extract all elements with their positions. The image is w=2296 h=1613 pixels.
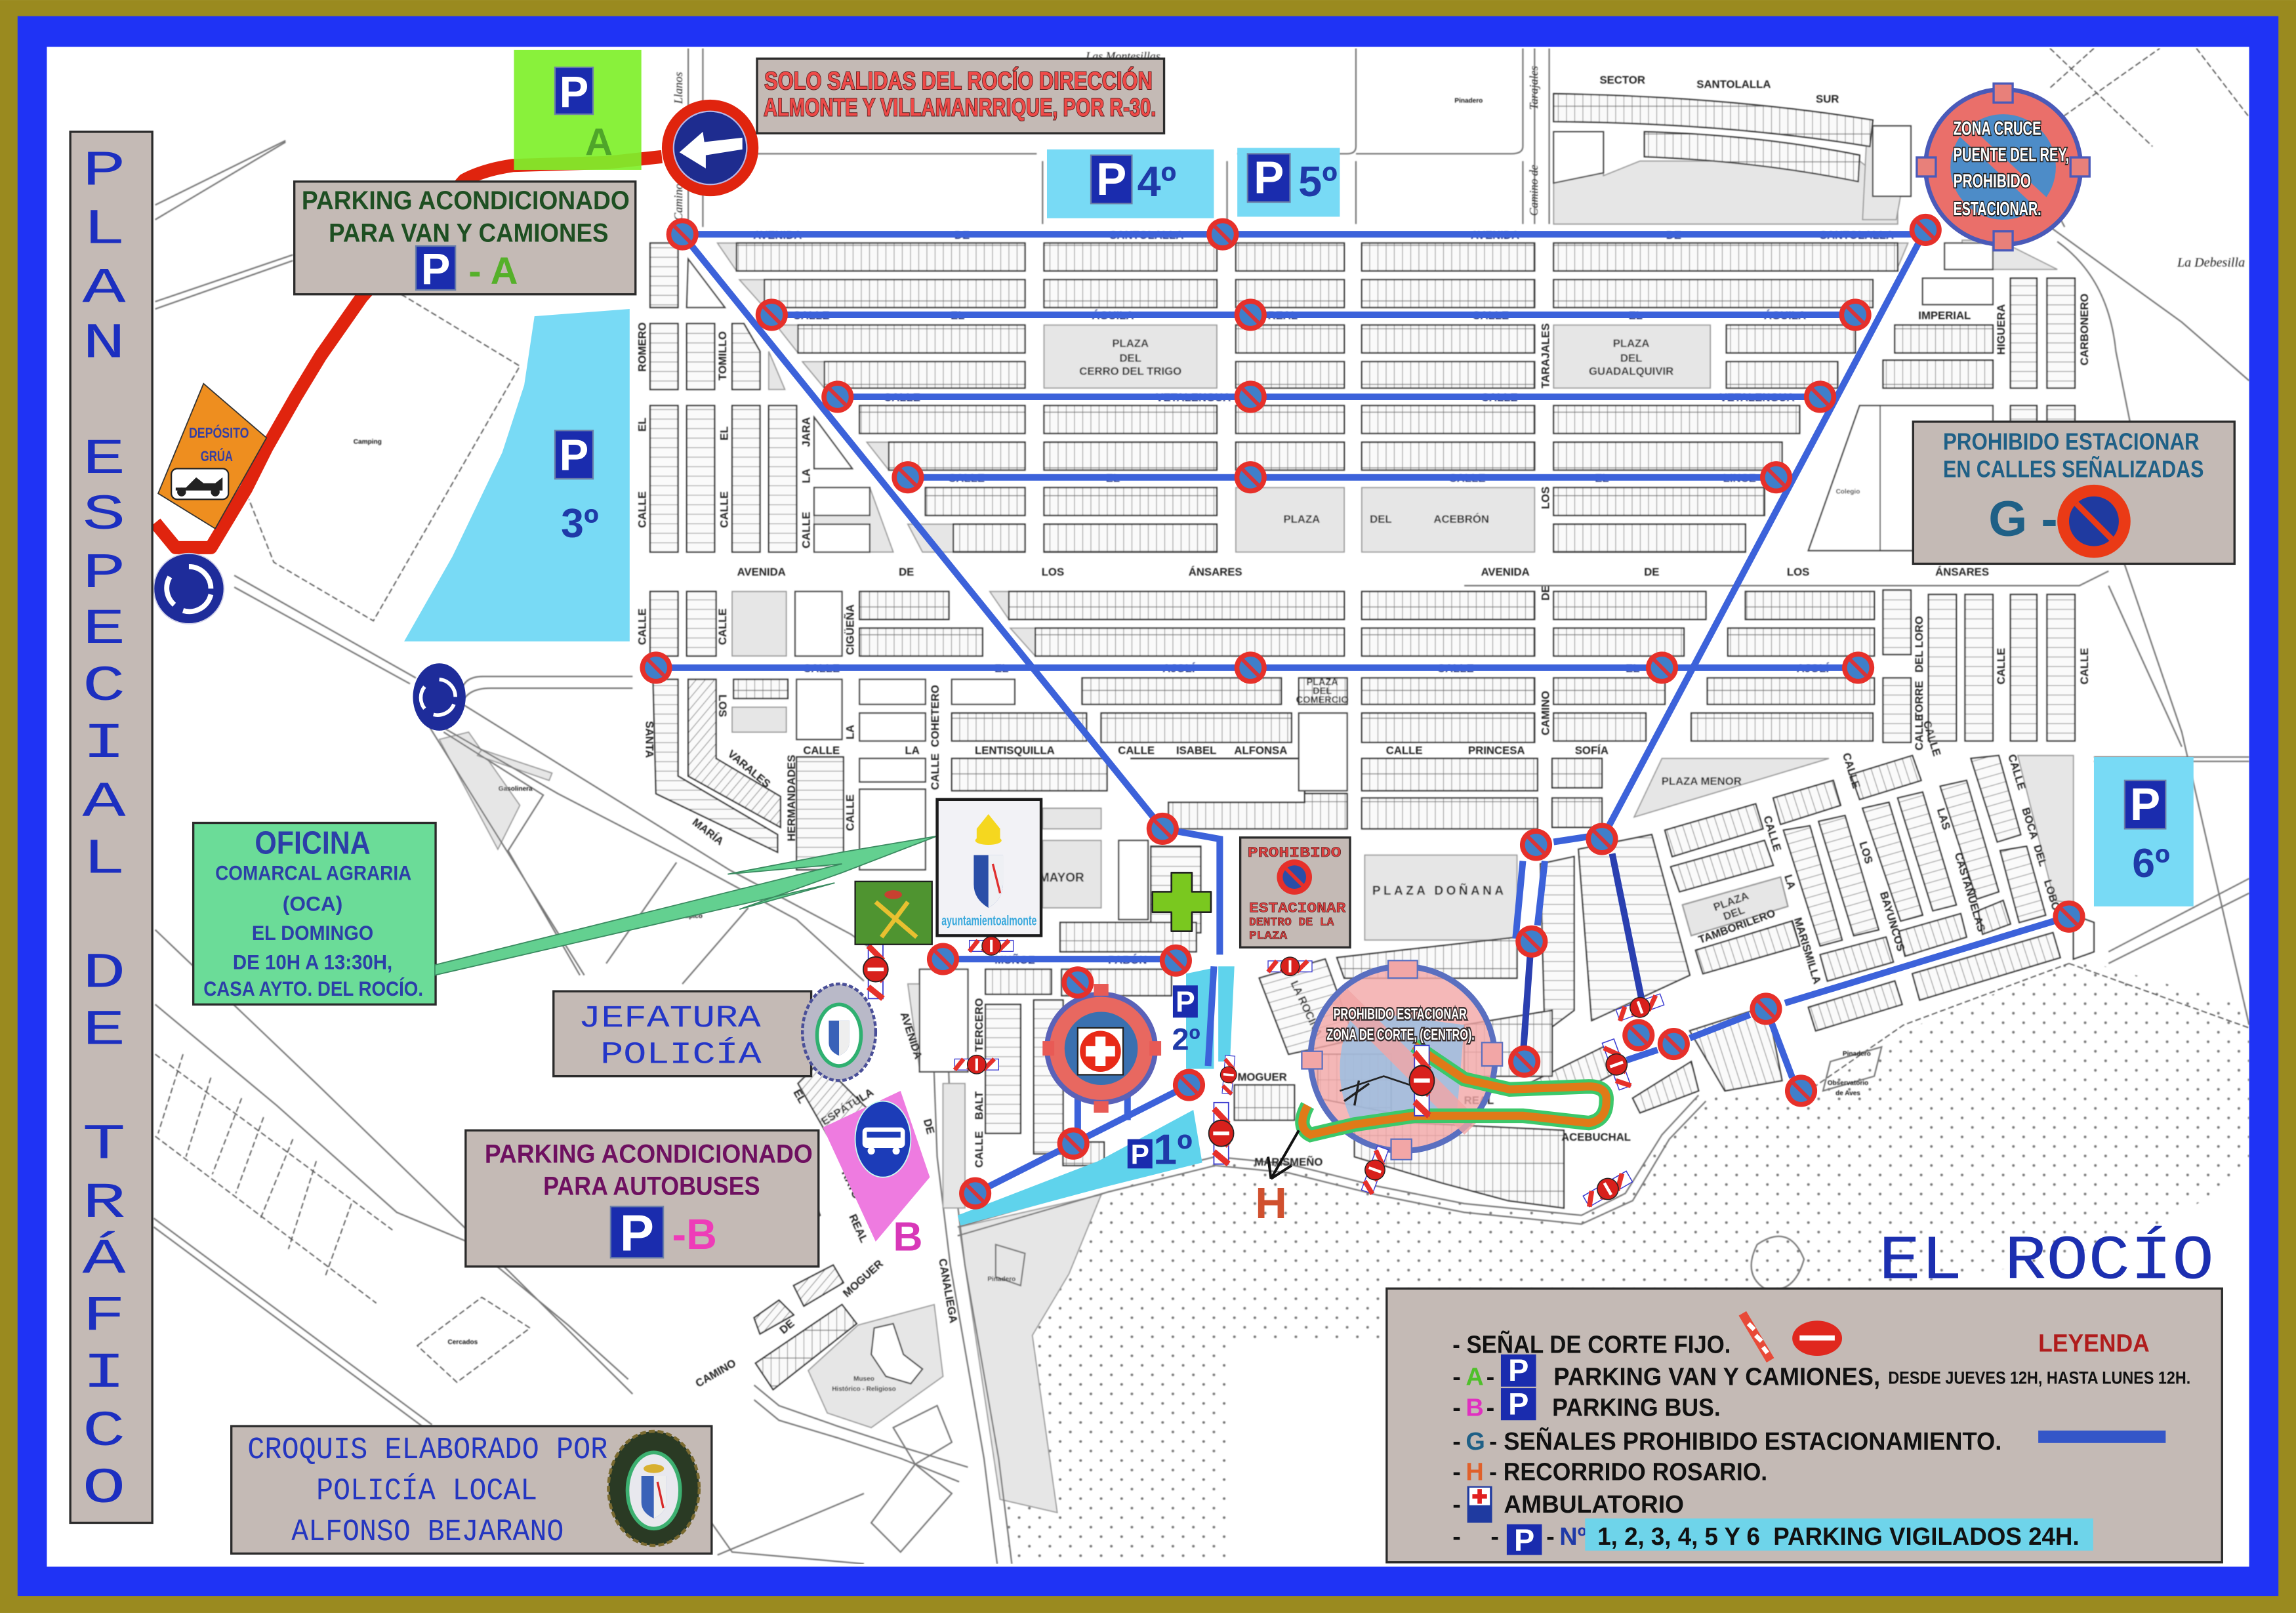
parking 1: 1º [1153, 1126, 1193, 1174]
icon: town hall logo [937, 800, 1041, 935]
legend row: G: - SEÑALES PROHIBIDO ESTACIONAMIENTO. [1489, 1427, 2001, 1456]
street name labels: TAMBORILERO [1696, 907, 1777, 946]
street name labels: CALLE [636, 491, 648, 528]
street name labels: CASTAÑUELAS [1952, 851, 1988, 933]
legend row: G: G [1466, 1428, 1485, 1456]
panel: no parking inside the plaza: PROHIBIDO [1248, 844, 1342, 861]
street name labels: REAL [846, 1212, 871, 1244]
legend row: guarded parking: 1, 2, 3, 4, 5 Y 6 PARKING VIGILADOS 24H. [1597, 1523, 2080, 1551]
legend row: B [1452, 1387, 1721, 1422]
panel: depot sign [158, 384, 266, 529]
panel: police headquarters: POLICÍA [600, 1038, 762, 1073]
street name labels: DE [954, 229, 970, 241]
street name labels: Llanos [672, 72, 685, 104]
zone: central no-parking area [1302, 960, 1607, 1160]
icon: bus sign [855, 1101, 911, 1177]
legend row: guarded parking: P [1514, 1523, 1534, 1557]
panel: OCA office: OFICINA [255, 825, 371, 861]
parking B: pink area [823, 1091, 930, 1259]
street name labels: DE [1666, 229, 1681, 241]
street name labels: ALFONSA [1234, 745, 1287, 757]
street name labels: CALLE [793, 310, 829, 322]
label: H rosary route: H [1255, 1179, 1287, 1228]
panel: credits: POLICÍA LOCAL [316, 1474, 537, 1509]
street name labels: SANTOLALLA [1696, 78, 1771, 91]
panel: OCA office [194, 823, 436, 1004]
panel: title PLAN ESPECIAL DE TRAFICO: PLANESPECIALDETRÁFICO [82, 144, 126, 1517]
legend row: ambulatory: AMBULATORIO [1504, 1491, 1684, 1519]
icon: local police badge [608, 1431, 699, 1545]
street name labels: DE [921, 1118, 937, 1135]
street name labels: PLAZA MENOR [1662, 775, 1742, 787]
icon: green first-aid cross [1153, 872, 1211, 931]
street name labels: CALLE [948, 472, 985, 484]
street name labels: CALLE [2005, 753, 2028, 791]
street name labels [354, 50, 2245, 1393]
street name labels: LAS [1935, 807, 1953, 831]
legend row: A: DESDE JUEVES 12H, HASTA LUNES 12H. [1888, 1368, 2190, 1387]
panel: van and truck parking [295, 182, 636, 295]
street name labels: LOS [1787, 565, 1809, 578]
panel: exit directions: ALMONTE Y VILLAMANRRIQUE, POR R-30. [764, 94, 1156, 121]
street name labels: DEL [1313, 686, 1332, 697]
street name labels: EL [951, 310, 965, 322]
street name labels: Museo [853, 1376, 874, 1383]
street name labels: PABÓN [1108, 954, 1147, 966]
parking 6: 6º [2132, 840, 2170, 886]
rosary route [1302, 1046, 1607, 1135]
panel: depot sign: GRÚA [201, 448, 233, 464]
street name labels: HERMANDADES [785, 755, 798, 842]
street name labels: Pinadero [1843, 1050, 1871, 1057]
street name labels: DE [1540, 585, 1552, 601]
street name labels: EL [1106, 472, 1120, 484]
street name labels: VETALENGUA [1720, 392, 1795, 404]
icon: parking sign: P [560, 431, 588, 480]
street name labels: PLAZA [1712, 889, 1750, 914]
panel: depot sign: DEPÓSITO [189, 424, 249, 441]
street name labels: Camping [354, 438, 382, 445]
street name labels: CALLE [973, 1131, 985, 1168]
street name labels: PLAZA [1112, 337, 1149, 350]
street name labels: AVENIDA [898, 1011, 925, 1061]
street name labels: PLAZA [1283, 513, 1320, 525]
zone label: PROHIBIDO ESTACIONAR [1334, 1006, 1467, 1023]
panel: no parking in signposted streets [1913, 422, 2234, 563]
legend row: A: - [1486, 1364, 1494, 1391]
street name labels: PLAZA DOÑANA [1372, 884, 1507, 898]
street name labels: PLAZA [1306, 678, 1338, 688]
street name labels: MOGUER [840, 1257, 886, 1299]
panel: OCA office: (OCA) [283, 892, 342, 915]
icon: parking sign: P [620, 1204, 654, 1261]
street name labels: MUÑOZ [994, 953, 1035, 966]
street name labels: LENTISQUILLA [975, 745, 1055, 757]
panel: credits [232, 1426, 712, 1553]
icon: roundabout 1 [154, 554, 224, 624]
street name labels: ACEBUCHAL [1561, 1131, 1631, 1143]
street name labels: CALLE [803, 663, 840, 675]
parking 4 [1047, 150, 1214, 218]
street name labels: ACEBRÓN [1433, 513, 1489, 525]
zone: ambulatory no-parking circle [1042, 984, 1161, 1113]
street name labels: CIGÜEÑA [843, 604, 856, 655]
parking 4: P [1096, 153, 1126, 205]
icon: town hall logo: ayuntamientoalmonte [941, 914, 1036, 929]
town blocks: south-east quarter [1523, 756, 2094, 1113]
label: - A: - A [468, 250, 518, 293]
panel: credits: ALFONSO BEJARANO [291, 1515, 564, 1550]
street name labels: SUR [1816, 92, 1839, 105]
panel: no parking in signposted streets: EN CALLES SEÑALIZADAS [1943, 457, 2204, 483]
street name labels: DEL [2031, 843, 2049, 868]
legend row: A [1452, 1353, 2190, 1391]
street name labels: CANALIEGA [936, 1257, 960, 1324]
street name labels: TERCERO [973, 998, 985, 1052]
legend title: LEYENDA [2038, 1330, 2150, 1357]
legend row: B: - [1452, 1395, 1461, 1422]
street name labels: SECTOR [1599, 73, 1645, 86]
legend row: guarded parking: - [1490, 1523, 1499, 1551]
street name labels: CAMINO [693, 1357, 738, 1390]
panel: OCA office: CASA AYTO. DEL ROCÍO. [203, 977, 423, 1000]
street name labels: EL [1626, 663, 1640, 675]
street name labels: Gasolinera [499, 785, 533, 792]
street name labels: CALLE [844, 794, 856, 831]
zone label [1326, 1006, 1475, 1043]
street name labels: LOS [1540, 487, 1552, 509]
parking 3: blue area [404, 309, 630, 642]
panel: legend [1387, 1288, 2222, 1562]
street name labels: ISABEL [1176, 745, 1216, 757]
legend row: fixed closure: - SEÑAL DE CORTE FIJO. [1452, 1330, 1731, 1359]
street name labels: JARA [800, 417, 812, 447]
street name labels: EL [636, 418, 648, 432]
fixed road-closure signs [863, 937, 1666, 1210]
no-parking streets: blue lines [656, 230, 2055, 1193]
street name labels: Colegio [1836, 488, 1860, 495]
panel: no parking inside the plaza [1240, 838, 1350, 947]
parking 2 [1172, 966, 1235, 1069]
icon: first aid cross [1078, 1028, 1123, 1074]
parking 6: P [2130, 779, 2160, 830]
street name labels: MOGUER [1237, 1071, 1287, 1083]
street name labels: LA [905, 745, 920, 757]
street name labels: DEL [1119, 352, 1141, 364]
parking 4: 4º [1138, 157, 1176, 205]
street name labels: COHETERO [929, 685, 941, 747]
zone: Puente del Rey crossing: ESTACIONAR. [1954, 199, 2041, 220]
parking 1 [958, 1110, 1202, 1225]
street name labels: EL [1595, 472, 1609, 484]
street name labels: CALLE [803, 745, 840, 757]
legend row: B: - [1486, 1395, 1494, 1422]
street name labels: REAL [1268, 310, 1298, 322]
street name labels: CAMINO [1540, 691, 1552, 735]
panel: exit directions: SOLO SALIDAS DEL ROCÍO DIRECCIÓN [764, 66, 1153, 95]
street name labels: LA [1782, 873, 1798, 891]
panel: bus parking: PARKING ACONDICIONADO [485, 1139, 813, 1168]
street name labels: ÁNSARES [1189, 565, 1242, 578]
street name labels: VETALENGUA [1156, 392, 1231, 404]
label: 3º: 3º [561, 500, 599, 546]
street name labels: CALLE [1481, 392, 1518, 404]
street name labels: LINCE [1723, 472, 1756, 484]
street name labels: RATO [839, 1168, 863, 1201]
panel: OCA office: EL DOMINGO [252, 922, 373, 945]
street name labels: CALLE [636, 609, 648, 645]
street name labels: EL [994, 663, 1008, 675]
street name labels: CALLE [1449, 472, 1485, 484]
street name labels: HIGUERA [1995, 304, 2007, 355]
street name labels: SOFÍA [1575, 745, 1609, 757]
icon: mandatory left arrow sign [662, 100, 758, 196]
town blocks: central quarter [754, 840, 1564, 1389]
icon: parking sign [611, 1204, 663, 1261]
street name labels: Centro Hípico [659, 913, 703, 920]
street name labels: GUADALQUIVIR [1589, 365, 1673, 377]
legend row: B: P [1508, 1387, 1528, 1421]
panel: OCA office: COMARCAL AGRARIA [215, 862, 411, 885]
panel: police headquarters: JEFATURA [579, 1002, 762, 1036]
street name labels: PLAZA [1613, 337, 1649, 350]
zone: Puente del Rey crossing: PUENTE DEL REY, [1954, 145, 2069, 166]
parking 5: 5º [1298, 157, 1338, 205]
street name labels: MARISMEÑO [1254, 1155, 1322, 1168]
street name labels: PRINCESA [1468, 745, 1525, 757]
street name labels: CALLE [1840, 751, 1862, 790]
street name labels: Pinadero [1454, 97, 1483, 104]
zone: Puente del Rey crossing: ZONA CRUCE [1954, 118, 2041, 139]
street name labels: CALLE [1921, 719, 1943, 758]
street name labels: AVENIDA [737, 565, 786, 578]
heading text [302, 186, 630, 247]
street name labels: CARBONERO [2078, 293, 2091, 365]
street name labels: AVENIDA [753, 229, 802, 241]
parking A: green square [514, 50, 642, 170]
panel: title PLAN ESPECIAL DE TRAFICO [70, 132, 152, 1522]
street name labels: REAL [1464, 1094, 1494, 1107]
legend row: B: B [1466, 1395, 1484, 1422]
zone label: ZONA DE CORTE, (CENTRO). [1326, 1026, 1475, 1043]
legend row: A: P [1508, 1353, 1528, 1387]
street name labels: SANTOLALLA [1109, 229, 1183, 241]
street name labels: Pinadero [987, 1276, 1015, 1283]
street name labels: CALLE [1995, 648, 2007, 685]
legend row: A: A [1466, 1364, 1484, 1391]
grey plots by the main road [440, 132, 2074, 1513]
panel: exit directions [757, 58, 1164, 133]
street name labels: BOCA [2019, 806, 2041, 840]
street name labels: TOMILLO [716, 331, 729, 380]
legend row: fixed closure [1452, 1313, 1842, 1360]
street name labels: VARALES [726, 748, 773, 790]
icon: roundabout 2 [413, 663, 466, 731]
street name labels: CALLE [1386, 745, 1423, 757]
street name labels: LOS [1856, 840, 1876, 865]
icon: no parking sign [1277, 859, 1312, 895]
zone: Puente del Rey crossing [1917, 83, 2089, 251]
street name labels: EL [790, 1087, 809, 1105]
panel: police headquarters [554, 984, 876, 1080]
no-parking signs at street ends [640, 214, 2085, 1210]
street name labels: AVENIDA [1471, 229, 1519, 241]
panel: no parking in signposted streets: G - [1988, 491, 2058, 547]
parking 5: P [1254, 152, 1284, 203]
label: A: A [585, 121, 613, 164]
street name labels: EL [718, 426, 730, 440]
street name labels: TORRE [1913, 681, 1925, 719]
panel: no parking inside the plaza: ESTACIONAR [1249, 900, 1346, 917]
hermitage drawing [1340, 1076, 1427, 1105]
legend row: H: H [1466, 1459, 1484, 1486]
panel: credits: CROQUIS ELABORADO POR [247, 1433, 607, 1468]
legend row: A: - [1452, 1364, 1461, 1391]
street name labels: CALLE [884, 392, 920, 404]
street name labels: CALLE [1913, 714, 1925, 750]
legend row: B: PARKING BUS. [1552, 1395, 1721, 1422]
street name labels: LOS [1042, 565, 1064, 578]
street name labels: TARAJALES [1540, 323, 1552, 388]
panel: no parking in signposted streets: PROHIBIDO ESTACIONAR [1943, 428, 2200, 455]
street name labels: CALLE [716, 609, 729, 645]
street name labels: ÁGUILA [1092, 310, 1134, 322]
street name labels: CALLE [1118, 745, 1155, 757]
icon: parking sign: P [560, 68, 588, 117]
label: -B: -B [672, 1210, 717, 1258]
street name labels: BAYUNCOS [1877, 890, 1908, 953]
street name labels: SANTOLALLA [1820, 229, 1894, 241]
street name labels: AJOLÍ [1162, 663, 1196, 675]
parking 2: 2º [1172, 1022, 1200, 1056]
street name labels: AJOLÍ [1797, 663, 1830, 675]
legend row: guarded parking [1452, 1519, 2093, 1557]
street name labels: LA ROCINA [1288, 979, 1325, 1039]
icon: parking sign: P [421, 245, 450, 294]
legend row: guarded parking: Nº [1559, 1523, 1587, 1551]
street name labels: CERRO DEL TRIGO [1079, 365, 1181, 377]
legend row: ambulatory: - [1452, 1491, 1461, 1519]
panel: bus parking [466, 1130, 819, 1267]
parking 6 [2094, 757, 2194, 907]
legend row: guarded parking: - [1546, 1523, 1555, 1551]
street name labels: ROMERO [636, 322, 648, 372]
icon: Guardia Civil logo [855, 882, 932, 945]
street name labels: ÁGUILA [1764, 310, 1806, 322]
street name labels: DEL [1620, 352, 1642, 364]
heading text: PARA VAN Y CAMIONES [329, 218, 608, 247]
street name labels: DEL LORO [1913, 616, 1925, 672]
street name labels: La Debesilla [2177, 255, 2245, 270]
legend row: G: - [1452, 1428, 1461, 1456]
street name labels: Histórico - Religioso [832, 1386, 896, 1393]
icon: police badge [802, 984, 876, 1080]
street name labels: SANTA [643, 721, 655, 758]
panel: bus parking: PARA AUTOBUSES [543, 1171, 760, 1200]
street name labels: MAYOR [1039, 871, 1084, 885]
red access route [155, 157, 662, 548]
street name labels: DE [1644, 565, 1659, 578]
icon: no parking sign [2057, 485, 2131, 558]
legend row: H: - [1452, 1459, 1461, 1486]
icon: rosary arrow [1268, 1130, 1299, 1179]
legend row: A: PARKING VAN Y CAMIONES, [1553, 1364, 1880, 1391]
town blocks: west columns [650, 243, 2075, 870]
parking 5 [1237, 148, 1340, 216]
street name labels: DEL [1721, 904, 1746, 923]
street name labels: de Aves [1835, 1090, 1860, 1097]
street name labels: MARÍA [690, 816, 726, 847]
street name labels: LA [800, 468, 812, 483]
legend row: H: - RECORRIDO ROSARIO. [1489, 1459, 1767, 1486]
icon: tow truck [171, 468, 228, 499]
street name labels: DEL [1370, 513, 1392, 525]
parking 2: P [1176, 986, 1195, 1018]
street name labels: LOBO [2041, 878, 2062, 912]
street name labels: ÁNSARES [1935, 565, 1989, 578]
street name labels: LOS [716, 695, 729, 717]
title: EL ROCIO: EL ROCÍO [1879, 1225, 2214, 1297]
street name labels: AVENIDA [1481, 565, 1530, 578]
street name labels: Las Montesillas [1085, 50, 1160, 63]
label: B: B [893, 1214, 922, 1259]
street name labels: CALLE [2078, 648, 2091, 685]
street name labels: DE [777, 1317, 797, 1336]
street name labels: CALLE [718, 491, 730, 528]
street name labels: IMPERIAL [1918, 310, 1971, 322]
street name labels: CALLE [1472, 310, 1509, 322]
street name labels: MARISMILLA [1792, 916, 1824, 985]
street name labels: LA [844, 725, 856, 739]
street name labels: Camino de [1527, 165, 1540, 216]
marsh dotted area [1000, 959, 2249, 1564]
street name labels: Camino [672, 184, 685, 220]
street name labels: Tarajales [1527, 66, 1540, 110]
panel: no parking inside the plaza: DENTRO DE LA [1249, 916, 1334, 929]
panel: OCA office: DE 10H A 13:30H, [233, 951, 392, 974]
arrow: office to town hall [435, 836, 937, 975]
street name labels: BALT [973, 1091, 985, 1120]
street name labels: CALLE [929, 753, 941, 790]
street name labels: DE [899, 565, 914, 578]
street name labels: EL [1629, 310, 1643, 322]
street name labels: ESPÁTULA [819, 1086, 876, 1128]
street name labels: Cercados [447, 1339, 478, 1346]
zone: Puente del Rey crossing: PROHIBIDO [1954, 171, 2031, 192]
street name labels: CALLE [1437, 663, 1474, 675]
parking 1: P [1131, 1139, 1149, 1170]
street name labels: CALLE [800, 512, 812, 548]
town blocks: north grid [737, 94, 2075, 552]
street name labels: COMERCIO [1296, 695, 1349, 705]
legend row: guarded parking: - [1452, 1523, 1461, 1551]
street name labels: CALLE [1761, 814, 1784, 853]
legend row: ambulatory [1452, 1486, 1684, 1522]
street name labels: Observatorio [1828, 1080, 1868, 1087]
panel: no parking inside the plaza: PLAZA [1249, 929, 1287, 943]
heading text: PARKING ACONDICIONADO [302, 186, 630, 215]
